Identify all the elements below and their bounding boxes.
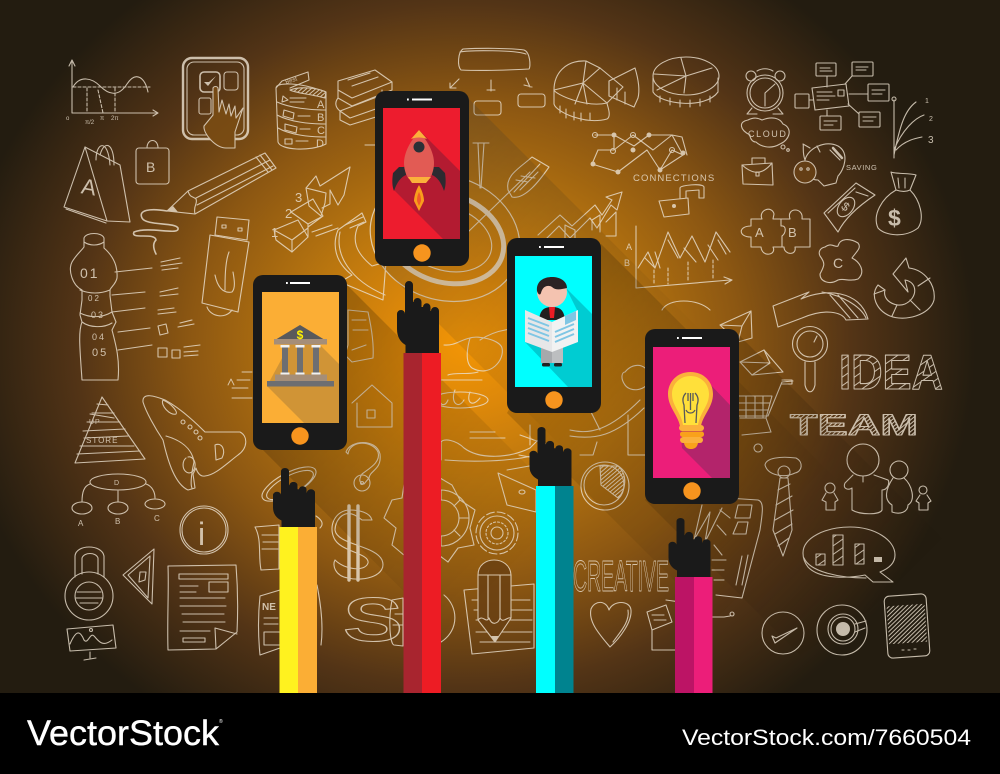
sketch: stack of books — [336, 70, 392, 125]
sketch: org chart: B — [115, 517, 120, 526]
sketch: broken t-square — [365, 143, 489, 188]
sketch: best list database — [276, 72, 326, 150]
sketch: small gear — [476, 512, 518, 554]
sketch: flowchart boxes — [450, 48, 545, 115]
sketch: hand on paper — [430, 329, 530, 408]
sketch: 3D pie chart — [554, 61, 639, 121]
sketch: infographic bottle: 03 — [91, 310, 105, 320]
screen — [262, 292, 339, 423]
long shadow: rocket phone — [375, 99, 760, 505]
doodles: hand-drawn business sketches — [64, 48, 943, 660]
phone: newspaper reader — [507, 238, 601, 413]
speaker — [539, 246, 564, 248]
home button — [545, 391, 563, 409]
sketch: big curved arrow — [773, 292, 868, 327]
sketch: magnifier — [792, 326, 828, 392]
hand — [530, 427, 572, 486]
phone body — [507, 238, 601, 413]
sketch: best list database: C — [317, 125, 325, 137]
sketch: puzzle C piece — [819, 240, 862, 282]
long shadow: bulb phone — [645, 335, 960, 655]
sketch: branching arrows 1 2 3: 1 — [925, 98, 929, 105]
sketch: document with folded corner — [168, 565, 238, 650]
sketch: padlock — [65, 547, 113, 620]
sketch: best list database: A — [317, 99, 325, 111]
sketch: puzzle pieces: B — [788, 225, 797, 240]
arm 1: yellow — [273, 468, 317, 693]
sketch: piggy bank saving: SAVING — [846, 163, 877, 172]
sketch: IDEA word: IDEA — [839, 346, 943, 400]
sketch: info circle: i — [198, 516, 205, 552]
sketch: line graph: o — [66, 116, 70, 122]
sketch: stairs with arrow and numbers: 3 — [295, 190, 302, 205]
doodles: hand-drawn business sketches: CREATIVE — [573, 552, 669, 601]
sketch: line graph — [66, 60, 158, 126]
sketch: pencil with squiggle — [134, 153, 276, 254]
sketch: book behind phone — [345, 310, 373, 362]
icon shadow — [680, 380, 730, 478]
phone body — [253, 275, 347, 450]
sketch: org chart: D — [114, 480, 119, 487]
sketch: triangle ruler — [123, 549, 154, 604]
sketch: SEO word — [343, 586, 455, 655]
sketch: info circle — [180, 506, 228, 554]
hand — [668, 518, 710, 577]
icon: bank building: $ — [297, 328, 304, 342]
sketch: line graph: 2π — [111, 116, 118, 122]
sketch: connections network and label — [590, 132, 715, 184]
sketch: infographic bottle — [70, 234, 200, 380]
sketch: usb stick — [202, 217, 249, 316]
screen — [653, 347, 730, 478]
sketch: credit card — [694, 497, 762, 598]
sketch: mind map — [795, 62, 889, 130]
sketch: best list database: D — [316, 138, 324, 150]
home button — [413, 244, 431, 262]
icon: rocket — [392, 130, 446, 211]
sketch: puzzle pieces: A — [755, 225, 764, 240]
phone: light bulb — [645, 329, 739, 504]
speaker — [677, 337, 702, 339]
speaker — [286, 282, 310, 284]
sketch: tie — [765, 457, 801, 556]
sketch: shopping cart — [738, 380, 793, 452]
sketch: rising arrow chart — [538, 192, 622, 242]
sketch: projector screen — [67, 625, 116, 660]
sketch: branching arrows 1 2 3: 2 — [929, 116, 933, 123]
sketch: curved arrow behind phones — [335, 213, 386, 300]
sketch: mountain area chart: B — [624, 258, 630, 268]
sketch: target with arrow — [354, 156, 549, 320]
sketch: pyramid store — [75, 397, 145, 463]
sketch: cloud thought: CLOUD — [748, 129, 788, 139]
long shadow: news phone — [507, 244, 880, 620]
sketch: stairs with arrow and numbers: 1 — [271, 225, 278, 240]
sketch: dollar sign — [332, 506, 383, 580]
sketch: pyramid store: STORE — [86, 436, 118, 445]
sketch: sheet of paper — [255, 525, 279, 570]
sketch: oval orbit and newspaper: NE — [262, 602, 276, 613]
phone: rocket — [375, 91, 469, 266]
sketch: space rocket doodle — [143, 396, 246, 490]
sketch: line graph: π — [100, 116, 104, 122]
sketch: open book — [441, 425, 540, 461]
sketch: infographic bottle: 01 — [80, 265, 100, 281]
sketch: speech bubble with bars — [803, 527, 895, 582]
arm 3: cyan — [530, 427, 574, 693]
sketch: shopping bag B: B — [146, 159, 155, 175]
sketch: heart — [591, 602, 631, 647]
arm 4: magenta — [668, 518, 712, 693]
footer bar — [0, 693, 1000, 774]
sketch: branching arrows 1 2 3: 3 — [928, 135, 934, 146]
phone body — [375, 91, 469, 266]
sketch: small chart left of bank phone — [228, 372, 252, 398]
sketch: money bag: $ — [888, 205, 901, 231]
sketch: banknote: $ — [839, 199, 853, 214]
icon: bank building — [267, 325, 334, 386]
sketch: money bag — [876, 172, 921, 235]
sketch: mountain area chart: A — [626, 242, 632, 252]
sketch: envelopes — [720, 311, 783, 375]
sketch: infographic bottle: 05 — [92, 347, 108, 359]
sketch: second 3D pie chart — [653, 57, 719, 107]
hand — [273, 468, 315, 527]
sketch: cloud thought — [741, 118, 789, 151]
sketch: org chart: C — [154, 514, 160, 523]
long shadow: bank phone — [253, 285, 620, 678]
sketch: tag or laptop — [498, 473, 536, 512]
arm 2: red — [397, 281, 441, 693]
sketch: pie circle — [581, 462, 629, 510]
sketch: oval orbit and newspaper — [257, 460, 322, 655]
sketch: clock — [746, 69, 785, 114]
sketch: circle and faint person — [570, 301, 710, 455]
sketch: org chart — [72, 474, 165, 528]
sketch: shopping bag A: A — [80, 173, 99, 201]
sketch: puzzle C piece: C — [833, 255, 843, 271]
sketch: connections network and label: CONNECTIONS — [633, 173, 715, 184]
sketch: pyramid store: UP — [89, 419, 101, 426]
sketch: briefcase — [742, 158, 773, 185]
phone body — [645, 329, 739, 504]
sketch: question mark — [346, 442, 380, 491]
sketch: best list database: B — [317, 112, 324, 124]
sketch: piggy bank saving — [794, 144, 877, 186]
icon shadow — [525, 288, 592, 387]
home button — [683, 482, 701, 500]
sketch: shopping bag B — [136, 140, 169, 184]
sketch: tablet with checkbox and hand — [183, 58, 248, 148]
icon: light bulb — [668, 372, 713, 449]
sketch: coffee cup from above — [817, 605, 867, 655]
hand — [397, 281, 439, 353]
sketch: house — [352, 385, 392, 427]
sketch: infographic bottle: 04 — [92, 332, 106, 342]
sketch: SEO word: S — [343, 586, 403, 655]
home button — [291, 427, 309, 445]
icon shadow — [394, 130, 460, 239]
icon: man reading newspaper — [525, 277, 578, 366]
image URL: VectorStock.com/7660504 — [682, 725, 971, 750]
sketch: branching arrows 1 2 3 — [892, 97, 934, 158]
phone: bank — [253, 275, 347, 450]
screen — [515, 256, 592, 387]
icon shadow — [268, 344, 339, 423]
sketch: smartphone with hatched screen — [884, 594, 930, 658]
sketch: check mark circle — [762, 612, 804, 654]
speaker — [407, 98, 432, 100]
sketch: stairs with arrow and numbers — [271, 167, 350, 252]
sketch: best list database: Best — [285, 76, 298, 86]
screen — [383, 108, 460, 239]
sketch: laptop near news phone — [507, 435, 548, 470]
sketch: sticky notes and pen — [647, 600, 734, 650]
sketch: circular arrow — [874, 258, 934, 318]
brand wordmark: VectorStock — [27, 714, 220, 753]
sketch: large gear — [384, 478, 475, 562]
sketch: shopping bag A — [64, 145, 130, 223]
sketch: org chart: A — [78, 519, 84, 528]
sketch: infographic bottle: 02 — [88, 294, 101, 303]
sketch: pencil on card — [464, 560, 534, 654]
sketch: people group — [822, 444, 931, 514]
sketch: line graph: π/2 — [85, 120, 95, 126]
sketch: stairs with arrow and numbers: 2 — [285, 206, 292, 221]
sketch: puzzle pieces — [741, 209, 810, 254]
sketch: banknote — [824, 183, 875, 232]
registered mark: ® — [219, 718, 223, 725]
sketch: mountain area chart — [624, 226, 732, 288]
sketch: open padlock — [659, 185, 704, 217]
sketch: TEAM word: TEAM — [790, 409, 918, 442]
